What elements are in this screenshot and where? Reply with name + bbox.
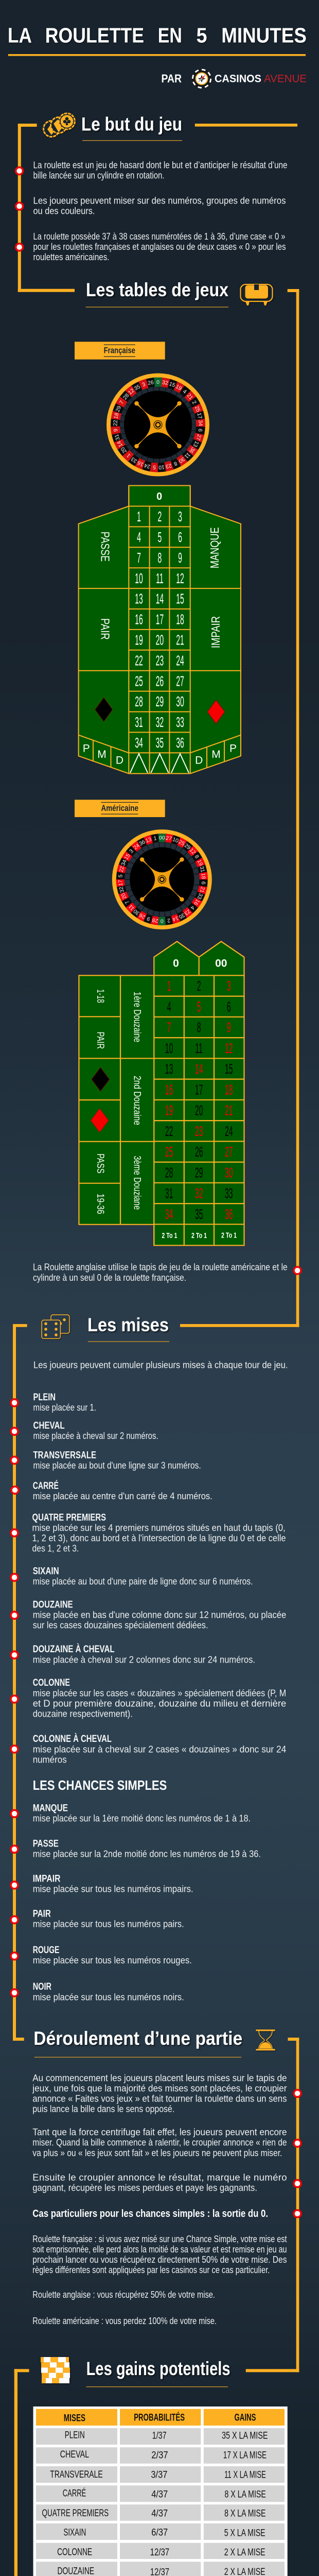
numbers grid: 21 [225, 1102, 233, 1118]
betting layout: française: PAIR [99, 618, 112, 640]
betting layout: américaine: 1ère Douzaine [132, 992, 142, 1042]
numbers grid: 1 [167, 978, 171, 994]
roulette wheel: française: 15 [168, 381, 176, 388]
roulette wheel: française: 26 [147, 379, 154, 386]
roulette wheel: américaine: 32 [118, 886, 126, 893]
text block: intro mises: Les joueurs peuvent cumuler plusieurs mises à chaque tour de jeu. [33, 1360, 288, 1370]
roulette wheel: française: 21 [186, 393, 194, 401]
list: types de mises: COLONNE À CHEVAL [33, 1733, 112, 1744]
roulette wheel: française: 10 [158, 464, 165, 470]
numbers grid: 29 [195, 1164, 203, 1181]
roulette wheel: française: 7 [118, 399, 125, 405]
list: types de mises: sur les cases douzaines spécialement dédiées. [33, 1620, 208, 1631]
numbers grid: 25 [135, 673, 143, 689]
list: types de mises: mise placée à cheval sur 2 numéros. [33, 1430, 158, 1441]
numbers grid: 36 [225, 1206, 233, 1222]
list: types de mises: mise placée en bas d'une colonne donc sur 12 numéros, ou placée [33, 1609, 286, 1620]
betting layout: américaine: 00 [215, 958, 227, 970]
icon: dice [42, 1315, 69, 1338]
roulette wheel: française: 34 [197, 420, 204, 426]
numbers grid: 16 [165, 1081, 173, 1098]
list: chances simples: IMPAIR [33, 1874, 61, 1885]
betting layout: française: D [116, 755, 123, 767]
roulette wheel: américaine: 31 [199, 866, 206, 873]
column: gains: 17 X LA MISE [223, 2450, 267, 2461]
roulette wheel: française: 16 [136, 460, 145, 468]
betting layout: américaine: 1-18 [95, 989, 105, 1003]
table cells [36, 2428, 285, 2576]
numbers grid: 8 [158, 550, 162, 566]
roulette wheel: française: 24 [144, 462, 151, 470]
roulette wheel: américaine: 4 [189, 904, 196, 911]
roulette wheel: américaine: 30 [132, 908, 141, 917]
numbers grid: 30 [225, 1164, 233, 1181]
numbers grid: 24 [176, 652, 184, 669]
icon: hourglass [256, 2029, 275, 2050]
roulette wheel: française: 11 [183, 451, 191, 460]
numbers grid: 1 [137, 509, 141, 524]
numbers grid: 9 [178, 550, 182, 566]
roulette wheel: française: 17 [196, 412, 203, 419]
roulette wheel: américaine: 3 [128, 848, 135, 855]
betting layout: américaine: 19-36 [95, 1194, 105, 1214]
numbers grid: 17 [156, 611, 164, 628]
timeline: section 3 frame [11, 1324, 27, 2041]
column: probabilités: 1/37 [152, 2431, 167, 2442]
roulette wheel: française: 29 [115, 405, 122, 413]
roulette wheel: américaine: 23 [183, 908, 192, 917]
roulette wheel: américaine: 1 [153, 835, 157, 842]
numbers grid: 2 [197, 978, 201, 994]
list: types de mises: des 1, 2 et 3. [32, 1543, 79, 1554]
numbers grid: 14 [195, 1061, 203, 1077]
roulette wheel: américaine: 12 [188, 847, 197, 856]
column: mises: PLEIN [65, 2430, 85, 2441]
column: gains: 8 X LA MISE [224, 2509, 265, 2519]
numbers grid: 25 [165, 1144, 173, 1160]
roulette wheel: américaine: 7 [124, 899, 131, 905]
numbers grid: 28 [165, 1164, 173, 1181]
list: types de mises [32, 1392, 286, 1765]
numbers grid: 36 [176, 735, 184, 751]
betting layout: française: IMPAIR [209, 616, 222, 648]
roulette wheel: française [109, 375, 207, 474]
icon: chip stack [41, 2357, 70, 2383]
text block: roulette anglaise: cylindre à un seul 0 de la roulette française. [33, 1272, 186, 1283]
title: EN [158, 23, 182, 47]
roulette wheel: française: 14 [116, 440, 124, 448]
numbers grid: 31 [135, 714, 143, 730]
betting layout: française: M [211, 749, 221, 760]
list: chances simples: NOIR [33, 1981, 51, 1992]
roulette wheel: française: 33 [130, 456, 138, 464]
list: types de mises: mise placée au centre d'un carré de 4 numéros. [33, 1490, 212, 1501]
timeline: section 2 frame [180, 289, 301, 1327]
numbers grid: 12 [176, 570, 184, 586]
list: chances simples: mise placée sur la 1ère moitié donc les numéros de 1 à 18. [33, 1813, 251, 1824]
numbers grid: 10 [135, 570, 143, 586]
title: 5 [197, 23, 207, 47]
roulette wheel: française: 3 [141, 381, 146, 388]
roulette wheel: américaine: 2 [167, 917, 171, 924]
text block: déroulement: va plus » ou « les jeux sont fait » et les joueurs ne peuvent plus miser. [32, 2147, 282, 2158]
roulette wheel: américaine: 26 [138, 912, 146, 920]
column: mises: CHEVAL [60, 2449, 89, 2460]
column: gains: 11 X LA MISE [224, 2469, 266, 2480]
text block: but du jeu [33, 160, 287, 262]
numbers grid: 21 [176, 632, 184, 648]
numbers grid: 13 [135, 590, 143, 607]
heading: Déroulement d'une partie: Déroulement d’une partie [33, 2028, 242, 2049]
column: probabilités: 4/37 [151, 2509, 168, 2519]
column: probabilités: 6/37 [151, 2527, 168, 2538]
roulette wheel: américaine: 20 [120, 892, 128, 900]
list: types de mises: mise placée sur 1. [33, 1402, 96, 1413]
list: chances simples: ROUGE [33, 1945, 60, 1956]
list: chances simples: PASSE [33, 1838, 59, 1849]
heading: Les gains potentiels: Les gains potentiels [86, 2358, 231, 2379]
text block: déroulement: Roulette américaine : vous perdez 100% de votre mise. [32, 2315, 217, 2326]
roulette wheel: française: 31 [114, 433, 121, 441]
list: types de mises: mise placée sur les cases « douzaines » spécialement dédiées (P, M [33, 1687, 286, 1698]
list: types de mises: numéros [33, 1754, 67, 1765]
numbers grid: 6 [178, 529, 182, 545]
roulette wheel: française: 35 [133, 383, 141, 392]
numbers grid [135, 509, 184, 751]
roulette wheel: américaine [114, 832, 210, 927]
betting layout: américaine: PASS [95, 1154, 105, 1174]
list: types de mises: 1, 2 et 3), donc au bord et à l'intersection de la ligne du 0 et de celle [32, 1533, 286, 1544]
roulette wheel: américaine: 13 [145, 836, 152, 844]
roulette wheel: française: 5 [152, 464, 156, 470]
roulette wheel: française: 9 [113, 428, 119, 432]
numbers grid: 16 [135, 611, 143, 628]
icon: casino chip logo [192, 69, 211, 89]
column: mises: TRANSVERALE [50, 2469, 103, 2480]
numbers grid: 6 [227, 998, 231, 1015]
list: types de mises: COLONNE [33, 1677, 70, 1688]
numbers grid: 7 [137, 550, 141, 566]
roulette wheel: française: 0 [156, 379, 160, 385]
numbers grid: 8 [197, 1019, 201, 1036]
column: probabilités: 2/37 [151, 2450, 168, 2461]
roulette wheel: américaine: 9 [146, 915, 151, 922]
roulette wheel: américaine: 35 [178, 912, 186, 920]
list: types de mises: douzaine respectivement). [33, 1708, 133, 1719]
betting layout: américaine: 2 To 1 [191, 1231, 207, 1240]
betting layout: américaine: 2 To 1 [162, 1231, 177, 1240]
list: types de mises: PLEIN [33, 1392, 56, 1403]
numbers grid: 9 [227, 1019, 231, 1036]
roulette wheel: américaine: 33 [196, 892, 204, 900]
roulette wheel: française: 36 [188, 446, 197, 454]
list: types de mises: mise placée au bout d'une paire de ligne donc sur 6 numéros. [33, 1576, 253, 1587]
numbers grid: 34 [135, 735, 143, 751]
numbers grid: 5 [158, 529, 162, 545]
numbers grid: 26 [156, 673, 164, 689]
numbers grid: 7 [167, 1019, 171, 1036]
table header [36, 2409, 285, 2426]
numbers grid: 27 [225, 1144, 233, 1160]
list: types de mises: mise placée sur les 4 premiers numéros situés en haut du tapis (0, [32, 1522, 286, 1533]
text block: déroulement: puis lance la bille dans le sens opposé. [32, 2104, 174, 2114]
betting layout: française: 0 [156, 491, 162, 502]
list: chances simples: PAIR [33, 1908, 51, 1919]
numbers grid: 33 [225, 1185, 233, 1201]
column: mises: SIXAIN [63, 2528, 86, 2538]
numbers grid: 34 [165, 1206, 173, 1222]
numbers grid: 4 [137, 529, 141, 545]
numbers grid: 4 [167, 998, 171, 1015]
betting layout: américaine: 3ème Douziane [132, 1156, 142, 1210]
roulette wheel: américaine: 17 [117, 879, 124, 886]
roulette wheel: américaine: 25 [178, 839, 186, 847]
title: MINUTES [221, 23, 307, 47]
betting layout: française: P [83, 742, 90, 754]
numbers grid: 33 [176, 714, 184, 730]
timeline: section 4 frame [246, 2038, 301, 2372]
list: chances simples: mise placée sur tous les numéros pairs. [33, 1919, 184, 1929]
column: probabilités [150, 2431, 169, 2576]
list: types de mises: SIXAIN [33, 1566, 59, 1577]
betting layout: américaine: PAIR [95, 1032, 105, 1049]
roulette wheel: française: 30 [178, 456, 186, 464]
roulette wheel: américaine: 28 [152, 917, 158, 924]
numbers grid: 18 [176, 611, 184, 628]
text block: but du jeu: ou des couleurs. [33, 206, 95, 216]
roulette wheel: américaine: 15 [123, 853, 132, 861]
roulette wheel: américaine: 19 [196, 859, 204, 867]
numbers grid: 32 [156, 714, 164, 730]
numbers grid: 15 [176, 590, 184, 607]
text block: but du jeu: bille lancée sur un cylindre en rotation. [33, 170, 165, 181]
roulette wheel: américaine: 24 [132, 842, 141, 851]
roulette wheel: américaine: 0 [161, 918, 164, 924]
list: chances simples: mise placée sur tous les numéros noirs. [33, 1991, 184, 2002]
text block: déroulement: Cas particuliers pour les chances simples : la sortie du 0. [32, 2208, 268, 2219]
heading: Le but du jeu: Le but du jeu [81, 113, 182, 134]
numbers grid: 12 [225, 1040, 233, 1056]
list: types de mises: DOUZAINE À CHEVAL [33, 1643, 115, 1655]
label: Française: Française [104, 346, 135, 355]
text block: déroulement: Au commencement les joueurs placent leurs mises sur le tapis de [32, 2073, 287, 2083]
roulette wheel: américaine: 27 [165, 835, 172, 842]
roulette wheel: américaine: 16 [192, 898, 201, 906]
numbers grid: 24 [225, 1123, 233, 1139]
column: probabilités: 4/37 [151, 2489, 168, 2500]
text block: roulette anglaise [33, 1262, 288, 1283]
numbers grid: 18 [225, 1081, 233, 1098]
roulette wheel: américaine: 22 [118, 866, 126, 873]
numbers grid: 31 [165, 1185, 173, 1201]
roulette wheel: française: 18 [113, 412, 120, 419]
betting layout: française: PASSE [99, 532, 112, 562]
title: LA [8, 23, 32, 47]
column: mises: COLONNE [57, 2547, 92, 2557]
numbers grid: 19 [165, 1102, 173, 1118]
roulette wheel: américaine: 14 [171, 915, 179, 923]
roulette wheel: américaine: 00 [159, 835, 165, 841]
roulette wheel: française: 1 [126, 452, 132, 459]
timeline: section 1 frame [16, 124, 297, 292]
list: types de mises: CHEVAL [33, 1420, 65, 1431]
column: gains: 5 X LA MISE [224, 2528, 265, 2538]
list: types de mises: mise placée au bout d'une ligne sur 3 numéros. [33, 1460, 201, 1471]
roulette wheel: française: 27 [194, 433, 202, 441]
roulette wheel: américaine: 18 [200, 873, 206, 879]
title [8, 23, 307, 47]
roulette wheel: française: 2 [191, 400, 198, 405]
roulette wheel: française: 12 [127, 387, 136, 396]
label: Américaine [75, 800, 165, 817]
list: chances simples [33, 1803, 261, 2002]
numbers grid: 27 [176, 673, 184, 689]
brand line: par Casinos Avenue: AVENUE [264, 73, 307, 84]
numbers grid: 20 [156, 632, 164, 648]
table header: MISES [64, 2413, 85, 2424]
label: Américaine: Américaine [101, 803, 138, 813]
list: types de mises: CARRÉ [33, 1480, 59, 1492]
numbers grid: 11 [195, 1040, 203, 1056]
column: mises [39, 2430, 113, 2576]
roulette wheel: française: 22 [112, 420, 119, 426]
betting layout: américaine: 0 [173, 958, 179, 970]
brand line: par Casinos Avenue [162, 69, 307, 89]
numbers grid: 23 [195, 1123, 203, 1139]
heading: Les mises: Les mises [87, 1314, 169, 1335]
column: gains: 8 X LA MISE [224, 2489, 266, 2500]
list: types de mises: mise placée à cheval sur 2 colonnes donc sur 24 numéros. [33, 1654, 255, 1665]
list: types de mises: et D pour première douzaine, douzaine du milieu et dernière [33, 1698, 286, 1708]
roulette wheel: française: 6 [197, 428, 203, 432]
numbers grid: 11 [156, 570, 164, 586]
column: mises: CARRÉ [63, 2488, 86, 2499]
table: gains potentiels [33, 2406, 288, 2576]
list: types de mises: QUATRE PREMIERS [32, 1512, 106, 1523]
roulette wheel: française: 25 [193, 405, 201, 413]
text block: déroulement: annonce « Faites vos jeux » et fait tourner la roulette dans un sens [32, 2093, 287, 2104]
numbers grid: 35 [195, 1206, 203, 1222]
brand line: par Casinos Avenue: CASINOS [215, 73, 261, 84]
label: Française [75, 342, 165, 360]
list: chances simples: mise placée sur tous les numéros rouges. [33, 1955, 192, 1965]
roulette wheel: américaine: 10 [171, 836, 180, 844]
betting layout: française: D [195, 755, 203, 767]
text block: déroulement: Tant que la force centrifuge fait effet, les joueurs peuvent encore [32, 2127, 287, 2138]
roulette wheel: américaine: 21 [199, 886, 206, 893]
roulette wheel: américaine: 6 [200, 881, 206, 885]
numbers grid: 14 [156, 590, 164, 607]
numbers grid: 19 [135, 632, 143, 648]
betting layout: française [79, 485, 241, 774]
column: gains [221, 2431, 268, 2576]
table header: GAINS [235, 2413, 256, 2424]
betting layout: française: M [97, 749, 107, 760]
numbers grid: 22 [135, 652, 143, 669]
icon: gaming table [241, 284, 273, 306]
numbers grid: 32 [195, 1185, 203, 1201]
roulette wheel: américaine: 5 [117, 874, 124, 878]
numbers grid: 29 [156, 693, 164, 710]
list: types de mises: mise placée sur à cheval sur 2 cases « douzaines » donc sur 24 [33, 1743, 286, 1754]
list: chances simples: mise placée sur tous les numéros impairs. [33, 1884, 193, 1894]
betting layout: américaine: 2nd Douzaine [132, 1076, 142, 1125]
column: probabilités: 3/37 [151, 2469, 167, 2480]
column: gains: 35 X LA MISE [222, 2431, 268, 2442]
text block: déroulement: jeux, une fois que la majorité des mises sont placées, le croupier [32, 2083, 287, 2094]
roulette wheel: américaine: 11 [127, 903, 136, 912]
betting layout: française: MANQUE [208, 527, 221, 568]
roulette wheel: américaine: 8 [193, 854, 200, 860]
numbers grid: 26 [195, 1144, 203, 1160]
title: ROULETTE [45, 23, 144, 47]
roulette wheel: française: 19 [174, 383, 183, 392]
numbers grid: 15 [225, 1061, 233, 1077]
roulette wheel: française: 32 [162, 379, 169, 386]
numbers grid: 2 [158, 509, 162, 524]
roulette wheel: française: 8 [173, 460, 178, 467]
text block: but du jeu: roulettes américaines. [33, 251, 109, 262]
text block: déroulement [32, 2073, 287, 2326]
numbers grid: 10 [165, 1040, 173, 1056]
brand line: par Casinos Avenue: PAR [162, 72, 182, 85]
betting layout: française: P [229, 742, 237, 754]
timeline: section 5 frame [12, 2369, 109, 2576]
table header: PROBABILITÉS [134, 2412, 185, 2424]
column: gains: 2 X LA MISE [224, 2547, 265, 2558]
numbers grid: 13 [165, 1061, 173, 1077]
numbers grid: 35 [156, 735, 164, 751]
text block: déroulement: Ensuite le croupier annonce le résultat, marque le numéro [32, 2172, 287, 2182]
subheading: les chances simples: LES CHANCES SIMPLES [33, 1777, 167, 1793]
text block: déroulement: Roulette anglaise : vous récupérez 50% de votre mise. [32, 2289, 215, 2300]
numbers grid: 30 [176, 693, 184, 710]
roulette wheel: américaine: 29 [183, 842, 192, 851]
numbers grid: 22 [165, 1123, 173, 1139]
numbers grid: 28 [135, 693, 143, 710]
list: types de mises: TRANSVERSALE [33, 1450, 96, 1461]
numbers grid: 17 [195, 1081, 203, 1098]
list: chances simples: MANQUE [33, 1803, 68, 1814]
numbers grid: 3 [227, 978, 231, 994]
roulette wheel: française: 20 [119, 446, 128, 454]
numbers grid: 5 [197, 998, 201, 1015]
betting layout: américaine [79, 941, 244, 1245]
column: mises: QUATRE PREMIERS [42, 2508, 109, 2519]
text block: déroulement: gagnant, récupère les mises perdues et paye les gagnants. [32, 2182, 257, 2193]
icon: three gaming chips [43, 113, 75, 137]
numbers grid: 3 [178, 509, 182, 524]
column: probabilités: 12/37 [150, 2547, 169, 2558]
roulette wheel: américaine: 34 [120, 859, 128, 867]
roulette wheel: française: 28 [122, 393, 131, 401]
roulette wheel: française: 13 [192, 440, 200, 448]
list: types de mises: DOUZAINE [33, 1600, 73, 1611]
numbers grid: 23 [156, 652, 164, 669]
heading: Les tables de jeux: Les tables de jeux [86, 279, 228, 300]
numbers grid [165, 978, 233, 1222]
list: chances simples: mise placée sur la 2nde moitié donc les numéros de 19 à 36. [33, 1849, 261, 1859]
roulette wheel: française: 23 [165, 462, 172, 470]
roulette wheel: américaine: 36 [138, 839, 147, 847]
betting layout: américaine: 2 To 1 [221, 1231, 237, 1240]
text block: but du jeu: Les joueurs peuvent miser sur des numéros, groupes de numéros [33, 195, 286, 206]
numbers grid: 20 [195, 1102, 203, 1118]
roulette wheel: française: 4 [182, 388, 188, 395]
